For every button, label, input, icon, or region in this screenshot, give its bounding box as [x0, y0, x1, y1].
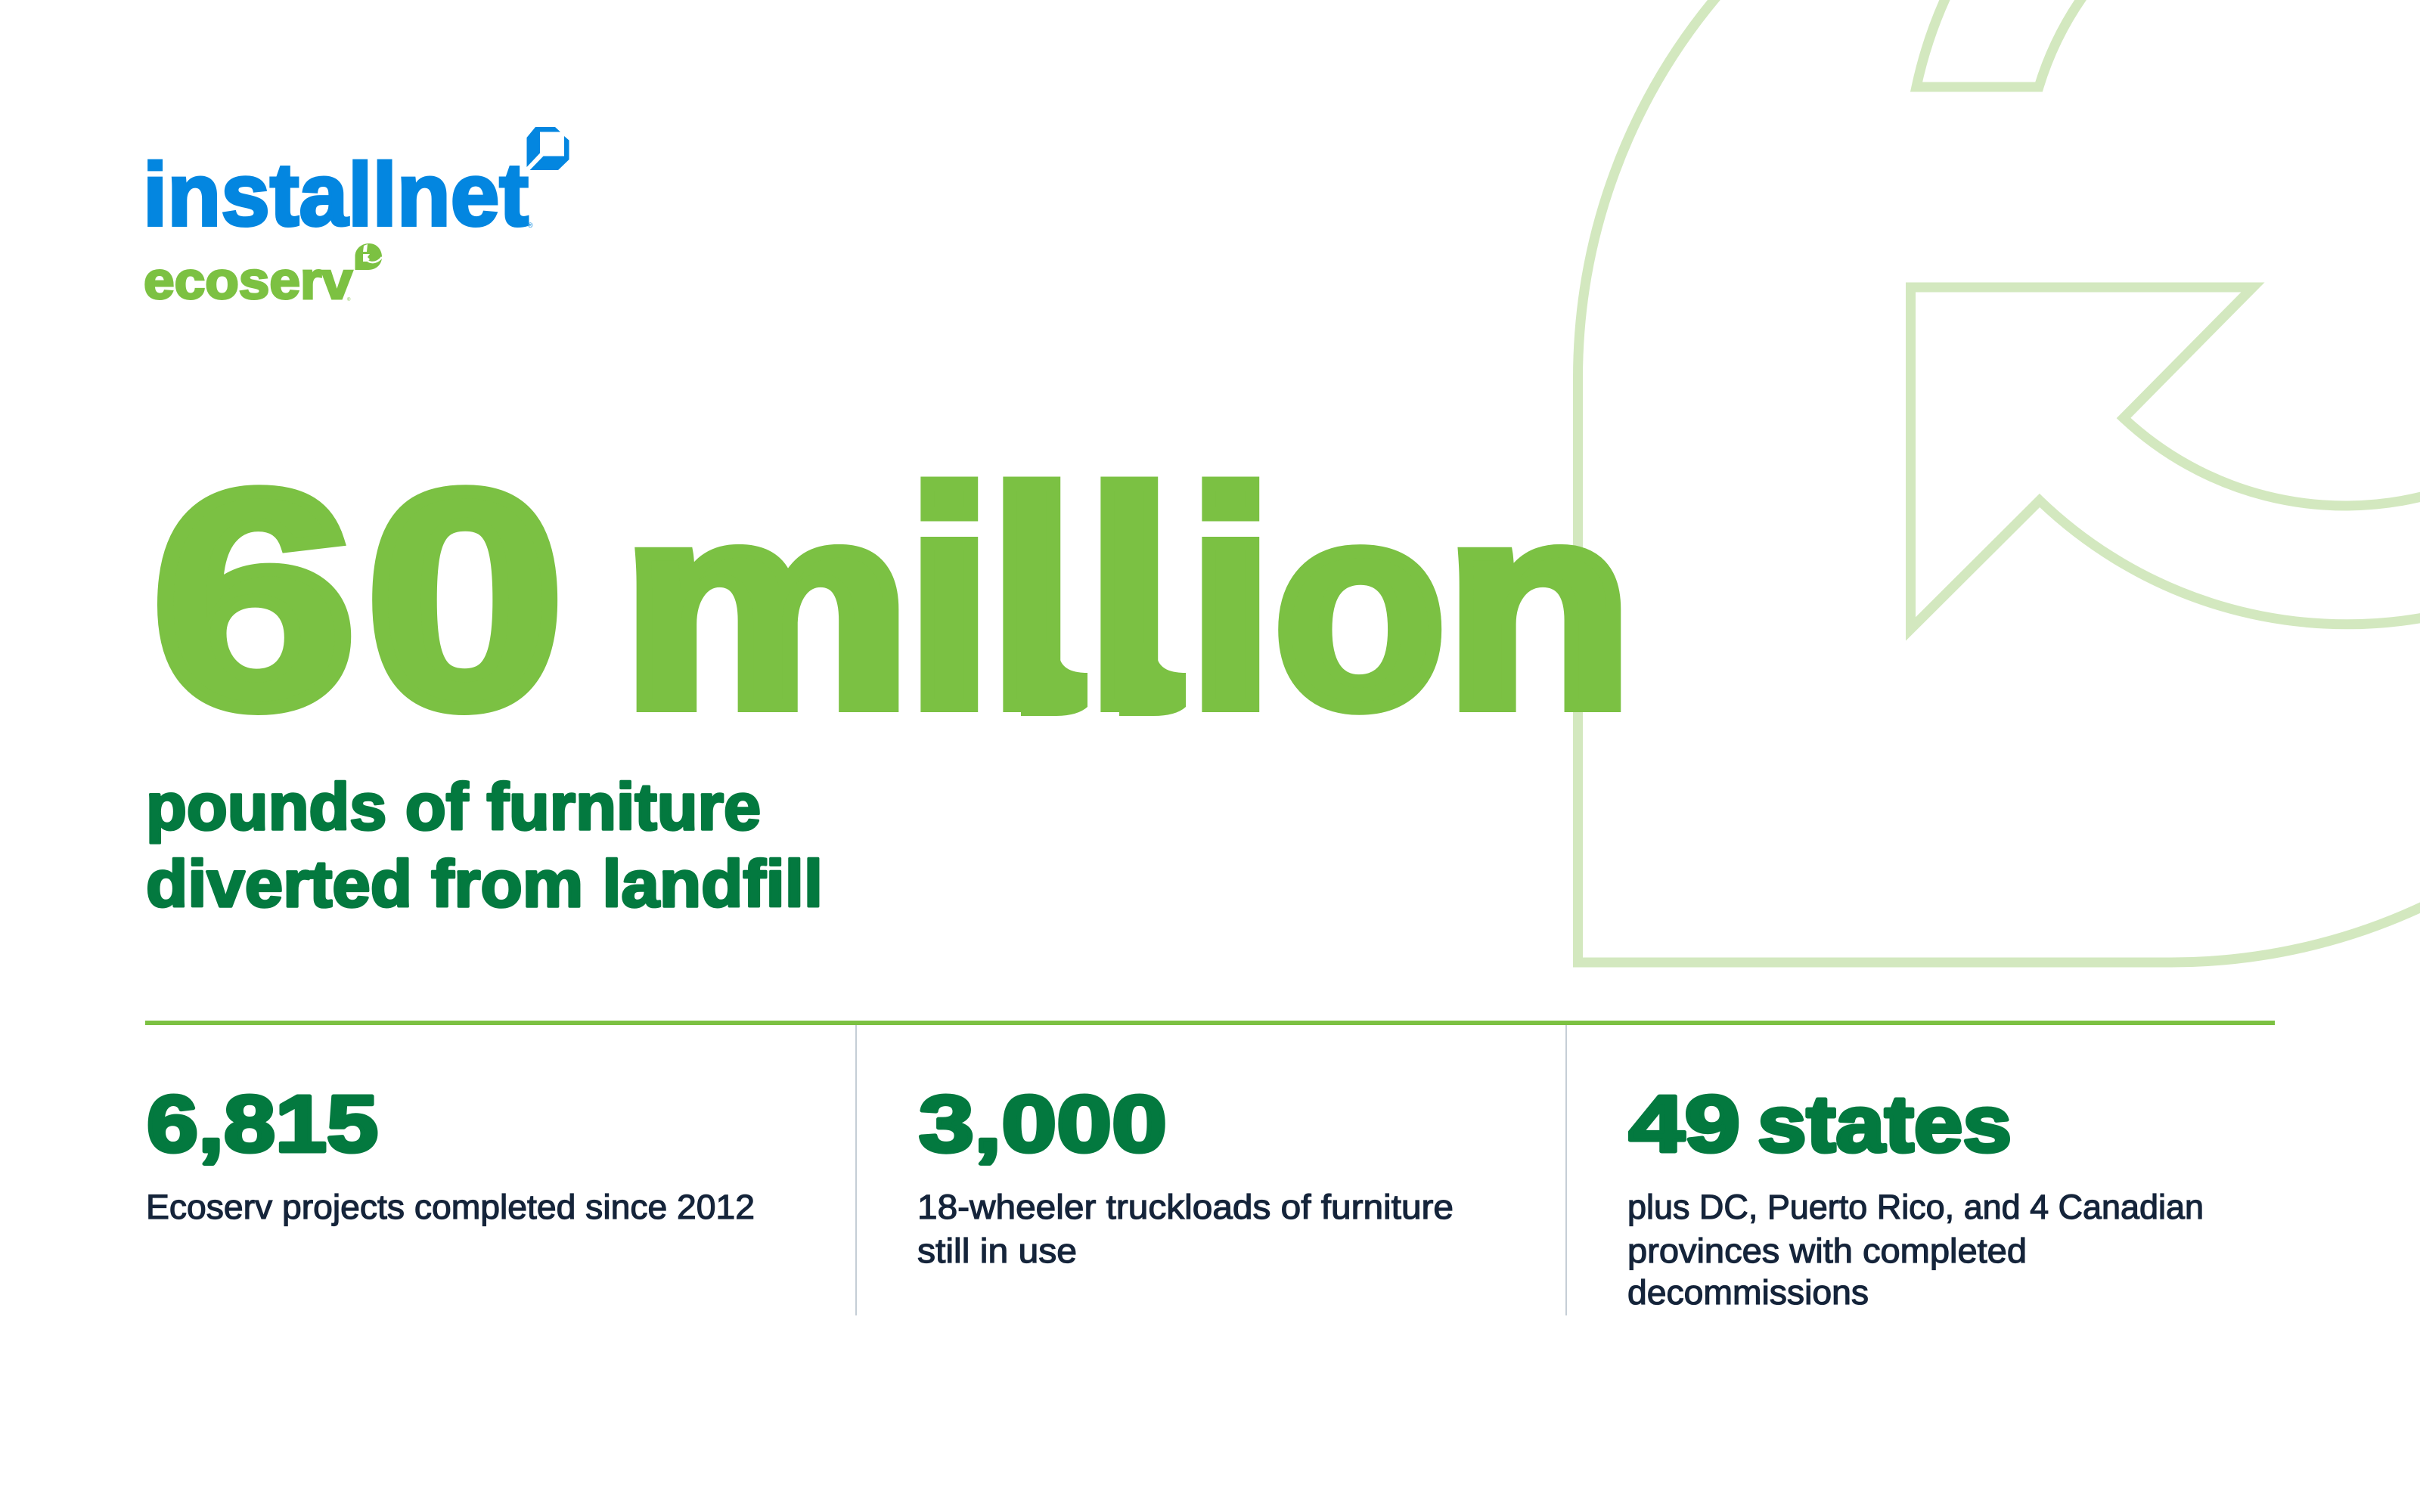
stat: states: 49: [1629, 1080, 1740, 1169]
headline: 60 million: l: [1086, 428, 1174, 770]
headline: 60 million: l: [988, 428, 1075, 770]
headline: 60 million: m: [622, 447, 911, 767]
logo: ecoserv: ®: [347, 297, 351, 302]
stat: projects completed: 6,815: [147, 1080, 378, 1169]
stat: projects completed: [146, 1080, 755, 1226]
stat: states: decommissions: [1627, 1273, 1869, 1312]
stat: truckloads: 18-wheeler truckloads of furniture: [917, 1188, 1454, 1226]
stat: states: plus DC, Puerto Rico, and 4 Canadian: [1627, 1188, 2204, 1226]
headline: 60 million: i: [906, 428, 994, 770]
background recycling arrow outline: [1578, 0, 2420, 962]
stat: truckloads: [917, 1080, 1454, 1270]
subheading: diverted from landfill: [146, 847, 823, 921]
stat: states: provinces with completed: [1627, 1232, 2027, 1270]
divider between stat 1 and 2: [855, 1025, 857, 1315]
stat: truckloads: 3,000: [919, 1080, 1167, 1169]
stat: states: states: [1758, 1080, 2012, 1169]
logo: ecoserv: ecoserv: [144, 251, 352, 310]
stat: projects completed: Ecoserv projects completed since 2012: [146, 1188, 755, 1226]
headline: 60 million: n: [1445, 447, 1633, 767]
headline: 60 million: 0: [366, 428, 564, 770]
divider between stat 2 and 3: [1565, 1025, 1567, 1315]
green rule: [145, 1021, 2275, 1025]
logo: installnet: installnet: [143, 145, 529, 245]
headline: 60 million: [152, 428, 1633, 770]
stat: states: [1627, 1080, 2204, 1312]
logo: installnet: ®: [528, 222, 533, 229]
stat: truckloads: still in use: [917, 1232, 1077, 1270]
headline: 60 million: i: [1187, 428, 1275, 770]
subheading: [146, 770, 823, 921]
subheading: pounds of furniture: [146, 770, 761, 844]
headline: 60 million: o: [1274, 447, 1446, 767]
headline: 60 million: 6: [152, 428, 356, 770]
